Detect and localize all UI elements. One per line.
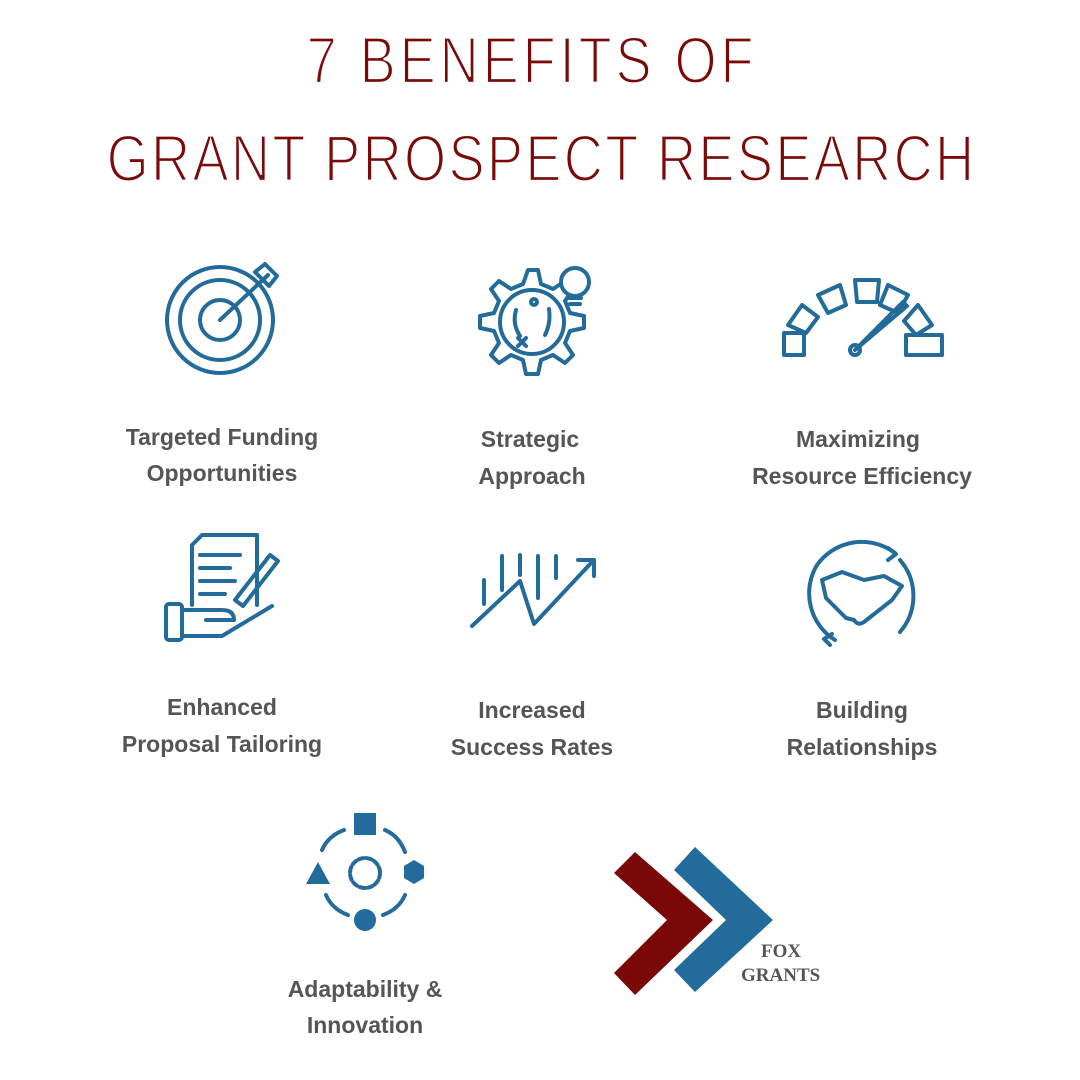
labels: Targeted Funding (126, 424, 318, 450)
icon: adaptability (306, 813, 424, 931)
icon: chart (472, 555, 594, 626)
icon: speedometer (784, 280, 942, 355)
labels: Opportunities (147, 460, 297, 486)
labels: Enhanced (167, 694, 277, 720)
labels: Strategic (481, 426, 579, 452)
icon: gear strategy (480, 268, 589, 374)
labels: Approach (478, 463, 586, 489)
title: 7 BENEFITS OF (307, 23, 754, 97)
icon: target (167, 264, 277, 373)
logo: fox grants: FOX (761, 941, 801, 962)
title: GRANT PROSPECT RESEARCH (107, 121, 974, 195)
labels: Proposal Tailoring (122, 731, 322, 757)
labels: Success Rates (451, 734, 613, 760)
icon: document in hand (166, 535, 278, 640)
icon: handshake (809, 542, 913, 645)
labels: Building (816, 697, 908, 723)
logo: fox grants: GRANTS (741, 965, 820, 986)
labels: Relationships (787, 734, 937, 760)
title (107, 23, 974, 195)
labels: Resource Efficiency (752, 463, 972, 489)
labels: Maximizing (796, 426, 920, 452)
labels: Innovation (307, 1012, 423, 1038)
labels: Adaptability & (288, 976, 442, 1002)
logo: fox grants (614, 847, 820, 995)
labels (122, 424, 972, 1038)
labels: Increased (478, 697, 586, 723)
